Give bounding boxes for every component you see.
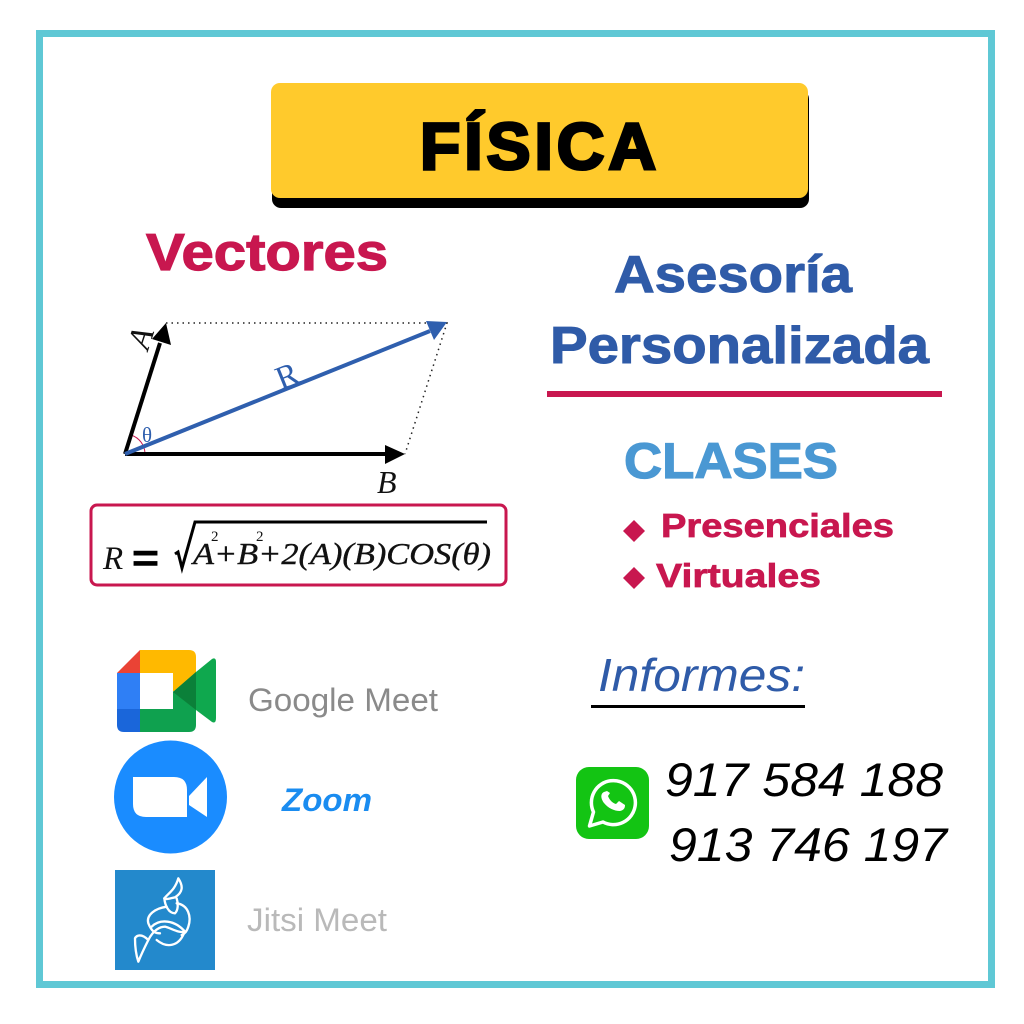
formula box	[91, 505, 506, 585]
heading: Informes: Informes:	[598, 649, 805, 701]
formula left side: R	[102, 541, 123, 577]
item: Presenciales: Presenciales	[661, 507, 894, 544]
equals sign: =	[132, 538, 159, 580]
label theta: θ	[142, 423, 152, 447]
phone numbers: 917 584 188	[665, 753, 943, 806]
heading: Asesoría Personalizada	[550, 246, 930, 375]
formula right side: A+B+2(A)(B)COS(θ)	[191, 536, 491, 571]
exponent B: 2	[256, 529, 264, 545]
icon: Google Meet	[117, 650, 216, 732]
item: Virtuales: Virtuales	[656, 557, 821, 594]
list: class types	[623, 507, 894, 594]
radical sign	[175, 522, 487, 568]
icon: WhatsApp	[576, 767, 649, 839]
label: Google Meet: Google Meet	[248, 682, 438, 718]
icon: Jitsi Meet	[115, 870, 215, 970]
label A: A	[121, 322, 162, 355]
bullet	[623, 520, 645, 542]
label B: B	[377, 464, 397, 500]
phone numbers: 913 746 197	[669, 818, 949, 871]
heading: Asesoría Personalizada: Asesoría	[614, 246, 853, 304]
label: Zoom: Zoom	[281, 782, 372, 818]
vector diagram	[121, 321, 447, 500]
heading: Vectores: Vectores	[146, 224, 388, 282]
icon: Zoom	[114, 740, 227, 854]
exponent A: 2	[211, 529, 218, 545]
heading: Asesoría Personalizada: Personalizada	[550, 317, 930, 375]
phone numbers	[665, 753, 949, 871]
title banner	[271, 83, 809, 208]
label: Jitsi Meet: Jitsi Meet	[247, 902, 387, 938]
title text: FÍSICA	[420, 109, 656, 183]
label R: R	[271, 356, 304, 397]
bullet	[623, 567, 645, 589]
heading: Clases: CLASES	[624, 433, 838, 489]
